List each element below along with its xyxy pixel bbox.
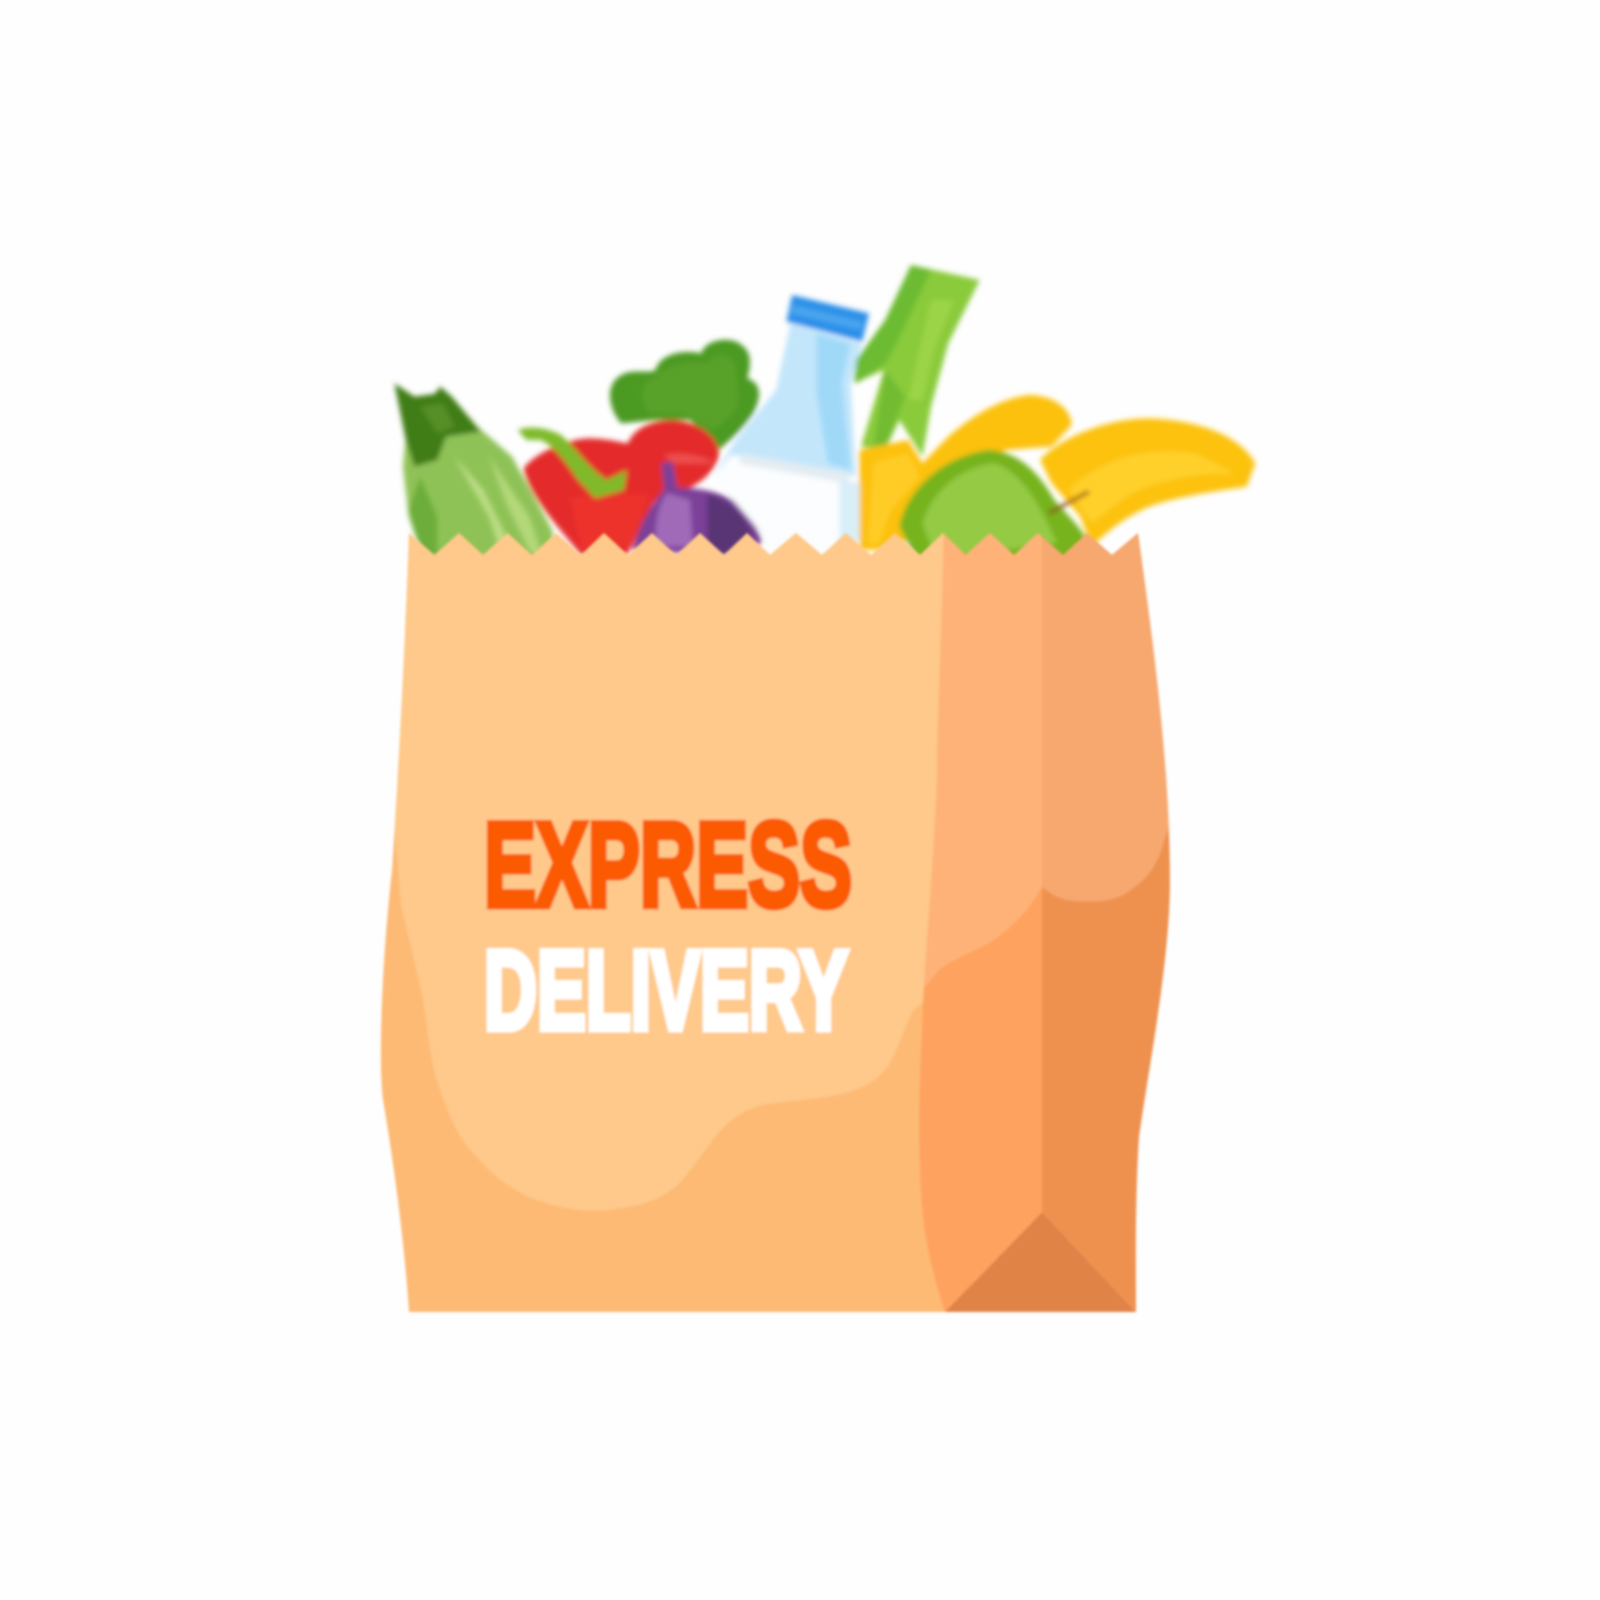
- icon: green apple: [899, 450, 1089, 567]
- bag side panel: inner fold: [919, 532, 1044, 1311]
- icon: zucchini: [394, 383, 558, 567]
- bag front panel: [370, 520, 980, 1320]
- icon: purple fig: [633, 462, 762, 557]
- paper bag: [370, 520, 1180, 1320]
- icon: lettuce: [610, 340, 759, 450]
- icon: left banana: [859, 395, 1072, 550]
- bag bottom fold triangle: [945, 1212, 1136, 1312]
- icon: red bell pepper: [518, 420, 719, 555]
- icon: milk bottle: [713, 295, 869, 567]
- illustration: grocery bag with express delivery label: [379, 261, 1259, 1314]
- heading: EXPRESS: EXPRESS: [484, 798, 852, 932]
- icon: celery: [854, 265, 980, 457]
- heading: DELIVERY: DELIVERY: [484, 928, 848, 1053]
- bag side panel: outer: [1042, 520, 1180, 1320]
- icon: right banana: [1040, 418, 1255, 547]
- groceries above the bag: [394, 265, 1255, 567]
- express delivery paper bag: [370, 520, 1180, 1320]
